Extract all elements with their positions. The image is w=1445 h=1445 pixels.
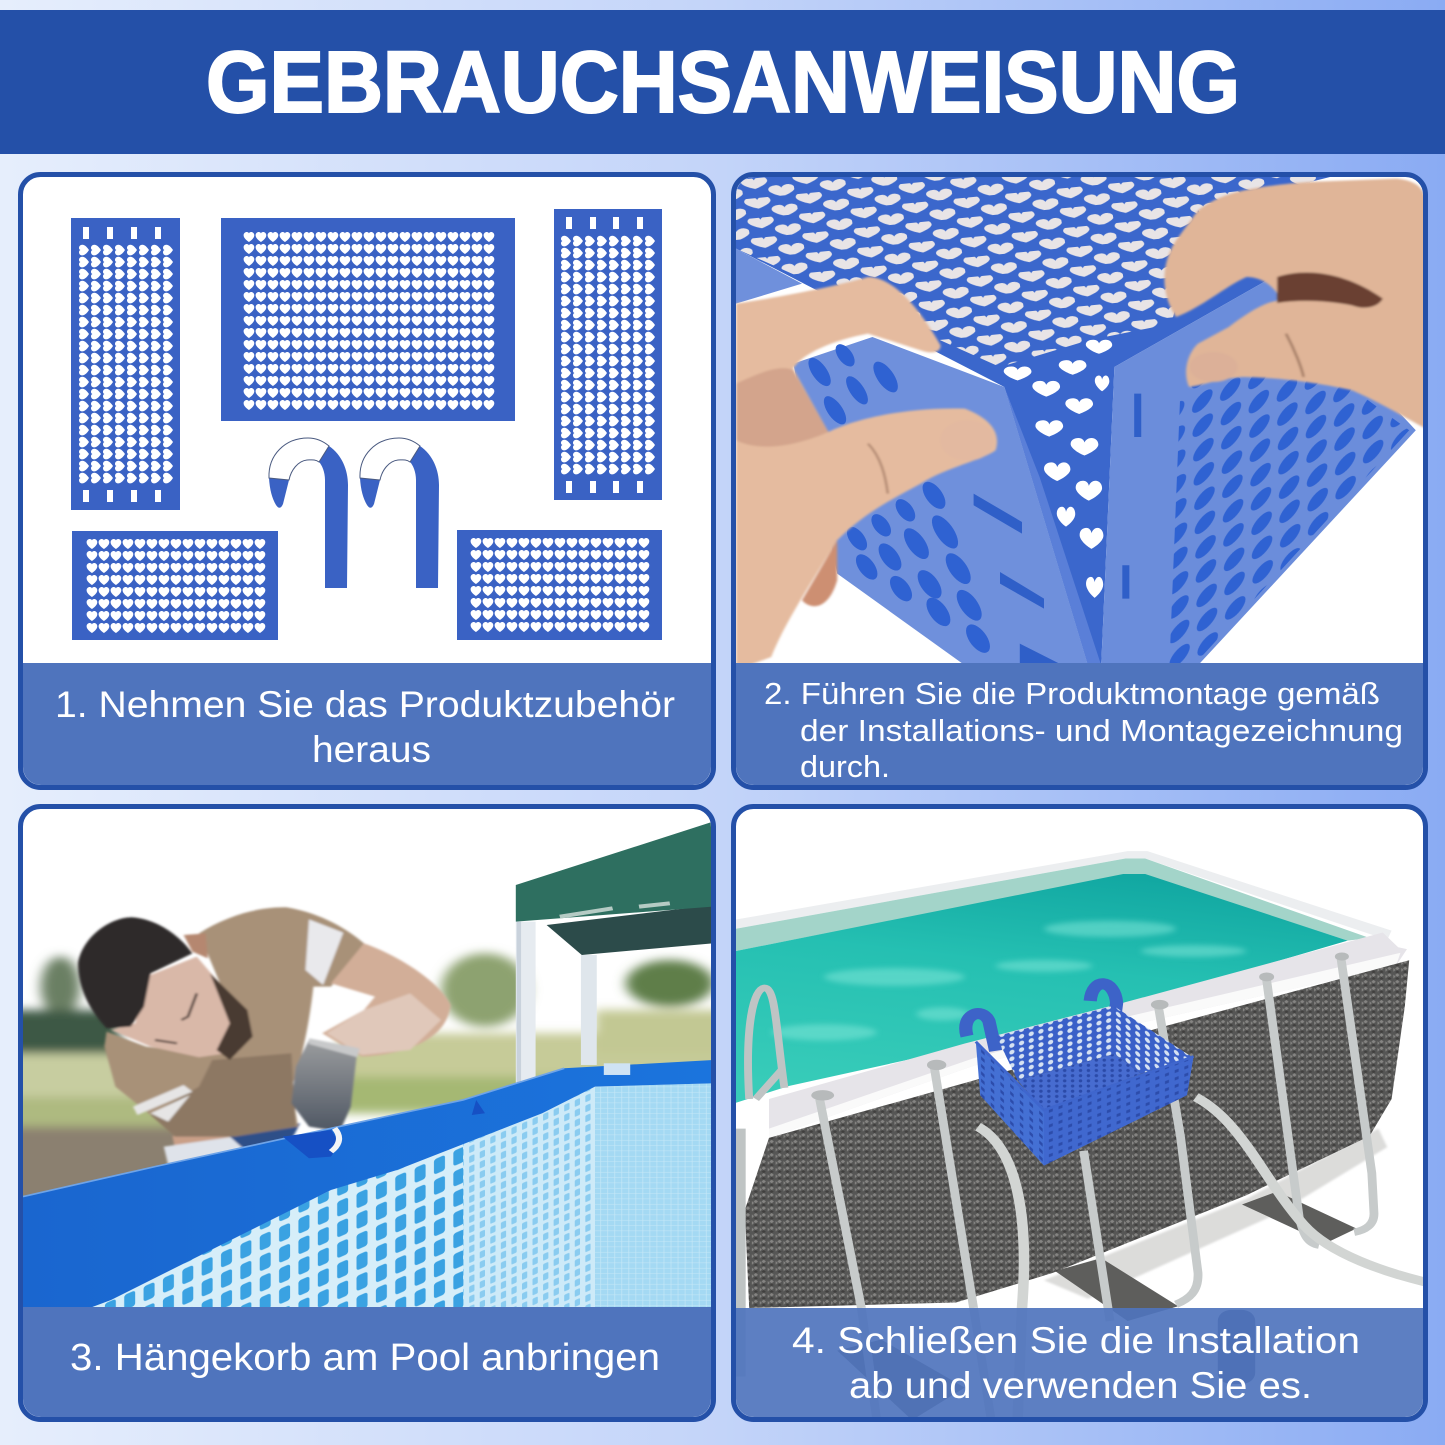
- caption band: [23, 663, 711, 785]
- photo: pool rim: [23, 1060, 713, 1308]
- part: top centre panel: [221, 218, 515, 421]
- photo: back rim and liner: [736, 851, 1392, 951]
- photo: filter pump: [1218, 1310, 1255, 1384]
- fold edge: [1004, 387, 1101, 665]
- icon: hook right: [360, 438, 439, 588]
- caption: step 2: der Installations- und Montagezeichnung: [800, 713, 1403, 748]
- part: bottom left panel: [72, 531, 278, 640]
- caption: step 1: 1. Nehmen Sie das Produktzubehör: [55, 684, 675, 725]
- photo: gazebo: [516, 822, 713, 1083]
- caption: step 2: [764, 676, 1403, 784]
- photo: ground mats: [837, 1192, 1356, 1420]
- photo: hoses: [975, 1093, 1423, 1308]
- photo: man: [78, 907, 451, 1165]
- part: bottom right panel: [457, 530, 662, 640]
- panel: step 3 attach basket: [5, 806, 727, 1420]
- caption: step 2: 2. Führen Sie die Produktmontage gemäß: [764, 676, 1380, 711]
- top sheet with heart holes: [736, 177, 1330, 665]
- caption: step 4: 4. Schließen Sie die Installation: [792, 1320, 1360, 1361]
- caption band: [736, 1308, 1423, 1417]
- photo: assembly scene: [736, 177, 1426, 665]
- part: left vertical panel: [71, 218, 180, 510]
- photo: pool wall mesh: [89, 1083, 713, 1308]
- panel: step 2 assembly: [734, 174, 1426, 788]
- caption: step 4: ab und verwenden Sie es.: [849, 1365, 1312, 1406]
- photo: front rim: [769, 932, 1407, 1138]
- right wall with drop holes: [1101, 277, 1416, 665]
- left wall with drop holes: [736, 249, 1088, 665]
- hand: right: [1164, 179, 1426, 429]
- photo: ladder: [740, 988, 784, 1376]
- photo: ground shadow: [1044, 1129, 1387, 1299]
- header band with title: [0, 10, 1445, 154]
- photo: pool legs: [820, 958, 1374, 1420]
- caption: step 1: heraus: [312, 729, 431, 770]
- icon: hanging basket: [966, 984, 1194, 1166]
- part: right vertical panel: [554, 209, 662, 500]
- hand: left: [736, 277, 997, 665]
- title: GEBRAUCHSANWEISUNG: [206, 34, 1240, 131]
- icon: hook left: [269, 438, 348, 588]
- photo: leg caps: [811, 952, 1349, 1100]
- photo: wicker wall: [745, 960, 1409, 1308]
- panel: step 4 finished installation: [734, 806, 1426, 1420]
- caption: step 2: durch.: [800, 749, 890, 784]
- photo: water: [736, 874, 1348, 1103]
- photo: pool scene: [5, 822, 727, 1308]
- caption band: [23, 1307, 711, 1417]
- photo: background trees and field: [5, 953, 727, 1207]
- panel: step 1 product accessories: [20, 174, 714, 788]
- caption band: [736, 663, 1423, 785]
- photo: pool scene: [736, 851, 1426, 1420]
- caption: step 3: 3. Hängekorb am Pool anbringen: [70, 1337, 660, 1379]
- caption: step 1: [55, 684, 675, 770]
- caption: step 4: [792, 1320, 1360, 1406]
